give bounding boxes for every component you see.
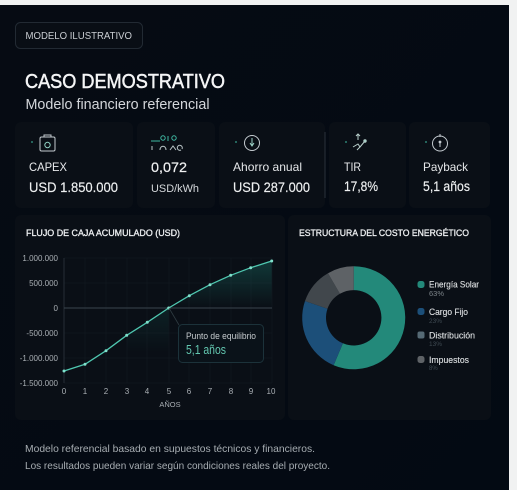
card: payback: Payback: [423, 160, 469, 174]
legend: Impuestos: [429, 355, 469, 365]
donut chart: [302, 266, 405, 369]
area under line: [169, 261, 272, 308]
card: TIR: TIR: [344, 160, 361, 174]
icon: capex: [31, 135, 55, 151]
legend: 13%: [429, 341, 442, 348]
legend: Energía Solar: [429, 280, 479, 290]
x axis labels: 8: [229, 387, 234, 396]
legend: 23%: [429, 318, 442, 325]
x axis labels: 2: [104, 387, 109, 396]
card: ahorro anual: Ahorro anual: [233, 160, 302, 174]
y axis labels: [20, 254, 59, 388]
y axis labels: 0: [54, 304, 59, 313]
card: payback: 5,1 años: [423, 179, 470, 194]
icon: payback: [425, 134, 448, 151]
card: costo: USD/kWh: [151, 183, 199, 195]
heading: flujo de caja: FLUJO DE CAJA ACUMULADO (USD): [26, 228, 180, 238]
line chart: [20, 254, 276, 409]
x axis labels: 1: [83, 387, 88, 396]
footer note: Modelo referencial basado en supuestos técnicos y financieros.: [25, 443, 315, 455]
panel: estructura del costo: [288, 215, 491, 420]
x axis labels: AÑOS: [159, 400, 181, 409]
legend: Distribución: [429, 330, 475, 340]
footer note: Los resultados pueden variar según condiciones reales del proyecto.: [25, 460, 330, 472]
card: CAPEX: USD 1.850.000: [29, 180, 118, 195]
panel: flujo de caja: [15, 215, 285, 420]
legend: [418, 280, 479, 372]
zero line: [64, 307, 272, 309]
card: TIR: 17,8%: [344, 179, 378, 194]
x axis labels: 0: [62, 387, 67, 396]
heading: estructura: ESTRUCTURA DEL COSTO ENERGÉTICO: [299, 228, 469, 238]
card: TIR: [329, 122, 406, 208]
icon: TIR: [345, 134, 366, 150]
y axis labels: 500.000: [29, 279, 59, 288]
card: ahorro anual: USD 287.000: [233, 180, 310, 195]
callout: punto de equilibrio: Punto de equilibrio: [186, 331, 256, 341]
x axis labels: 6: [187, 387, 192, 396]
tag: modelo ilustrativo: MODELO ILUSTRATIVO: [26, 31, 132, 42]
tag: modelo ilustrativo: [16, 22, 142, 48]
legend: Cargo Fijo: [429, 307, 468, 317]
curve: [64, 261, 272, 371]
callout: punto de equilibrio: 5,1 años: [186, 343, 226, 357]
x axis labels: 9: [249, 387, 254, 396]
x axis labels: 3: [125, 387, 130, 396]
x axis labels: [62, 387, 276, 409]
y axis labels: 1.000.000: [22, 254, 59, 263]
card: CAPEX: CAPEX: [29, 160, 67, 174]
callout: punto de equilibrio: [169, 308, 264, 362]
card: payback: [409, 122, 490, 208]
subtitle: Modelo financiero referencial: [26, 97, 210, 113]
card: costo: [137, 122, 215, 208]
title: CASO DEMOSTRATIVO: [25, 70, 225, 93]
y axis labels: -1.500.000: [20, 379, 59, 388]
card: ahorro anual: [219, 122, 325, 208]
y axis labels: -1.000.000: [20, 354, 59, 363]
x axis labels: 4: [145, 387, 150, 396]
icon: ahorro: [235, 136, 260, 150]
card: costo: 0,072: [151, 159, 187, 175]
x axis labels: 5: [167, 387, 172, 396]
x axis labels: 7: [208, 387, 213, 396]
legend: 8%: [429, 366, 438, 372]
card: CAPEX: [15, 122, 133, 208]
footer note: [25, 443, 330, 472]
y axis labels: -500.000: [26, 329, 59, 338]
x axis labels: 10: [267, 387, 276, 396]
icon: costo: [151, 136, 182, 150]
legend: 63%: [429, 289, 444, 298]
